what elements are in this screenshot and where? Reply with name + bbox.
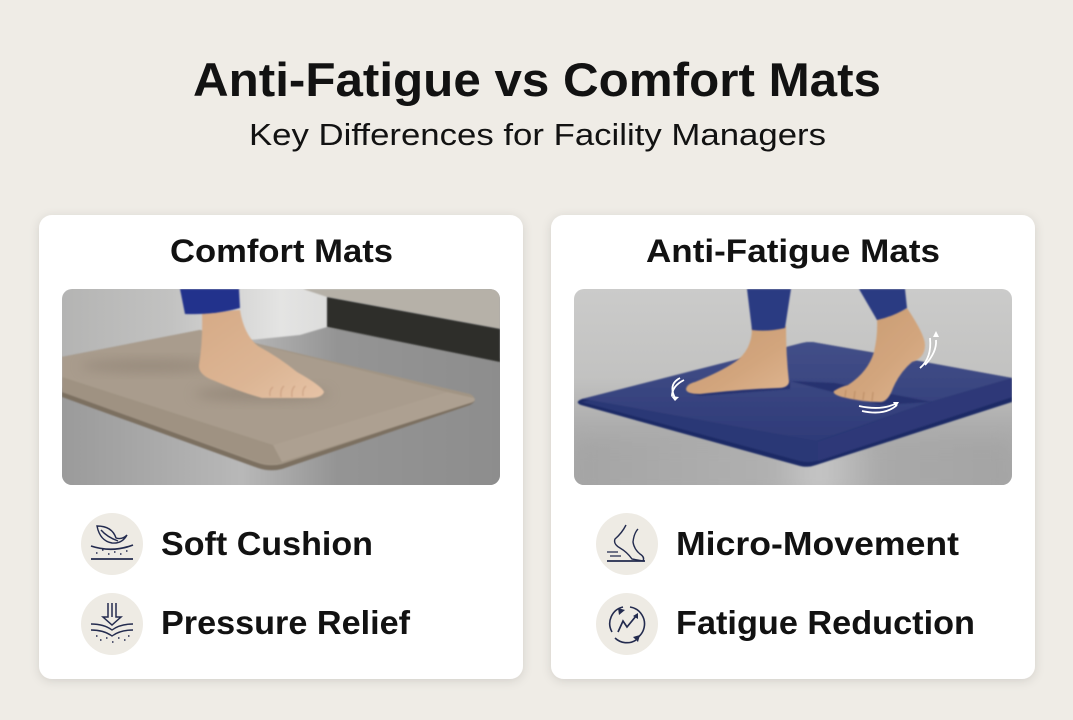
mat	[62, 330, 475, 470]
feature label: pressure relief: Pressure Relief	[161, 604, 411, 641]
right foot	[834, 308, 925, 402]
heading: anti-fatigue mats: Anti-Fatigue Mats	[646, 233, 940, 269]
foot	[199, 310, 324, 398]
mat	[578, 342, 1012, 467]
subtitle: Key Differences for Facility Managers	[249, 117, 826, 152]
icon: pressure arrow	[81, 593, 143, 655]
trouser leg	[180, 289, 240, 314]
left foot	[686, 326, 789, 394]
motion arrows	[672, 338, 936, 413]
card background: comfort mats	[39, 215, 523, 679]
heading: comfort mats: Comfort Mats	[170, 233, 393, 269]
feature label: micro-movement: Micro-Movement	[676, 525, 959, 562]
panel: comfort mats	[39, 215, 523, 679]
panel: anti-fatigue mats	[551, 215, 1035, 679]
icon: foot in motion	[596, 513, 658, 575]
title: Anti-Fatigue vs Comfort Mats	[193, 53, 881, 106]
illustration: foot on beige comfort mat	[62, 289, 500, 485]
feature label: fatigue reduction: Fatigue Reduction	[676, 604, 975, 641]
icon: feather on cushion	[81, 513, 143, 575]
illustration: feet on navy anti-fatigue mat	[574, 289, 1012, 500]
feature label: soft cushion: Soft Cushion	[161, 525, 373, 562]
trouser legs	[747, 289, 791, 331]
icon: fatigue reduction cycle	[596, 593, 658, 655]
card background: anti-fatigue mats	[551, 215, 1035, 679]
cabinet	[303, 289, 500, 329]
